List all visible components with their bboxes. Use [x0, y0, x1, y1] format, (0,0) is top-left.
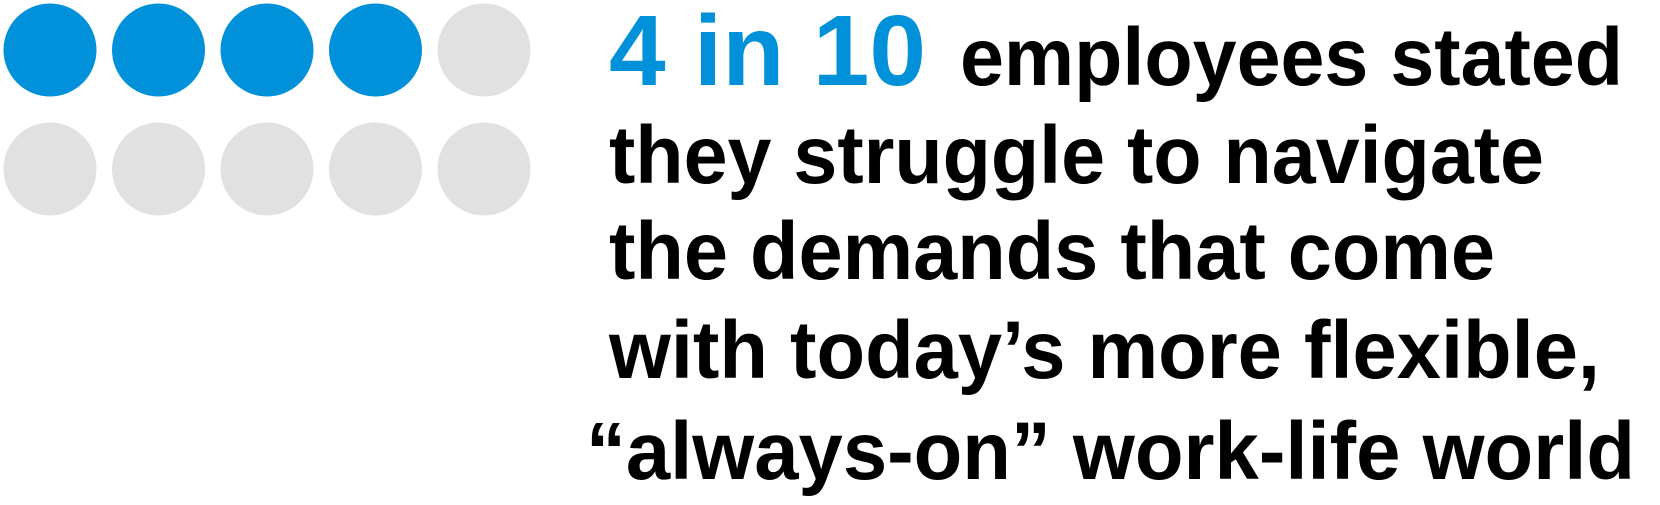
- text line 5: “always-on” work-life world: [586, 406, 1635, 497]
- text line 1: employees stated: [960, 12, 1623, 103]
- dot chart: 4 of 10: [4, 4, 530, 216]
- text line 4: with today’s more flexible,: [608, 305, 1600, 396]
- statement text: [586, 0, 1635, 497]
- icon: filled dots row 1: [4, 4, 422, 96]
- text line 2: they struggle to navigate: [609, 110, 1544, 201]
- icon: empty dots: [4, 4, 530, 216]
- text line 3: the demands that come: [609, 206, 1495, 297]
